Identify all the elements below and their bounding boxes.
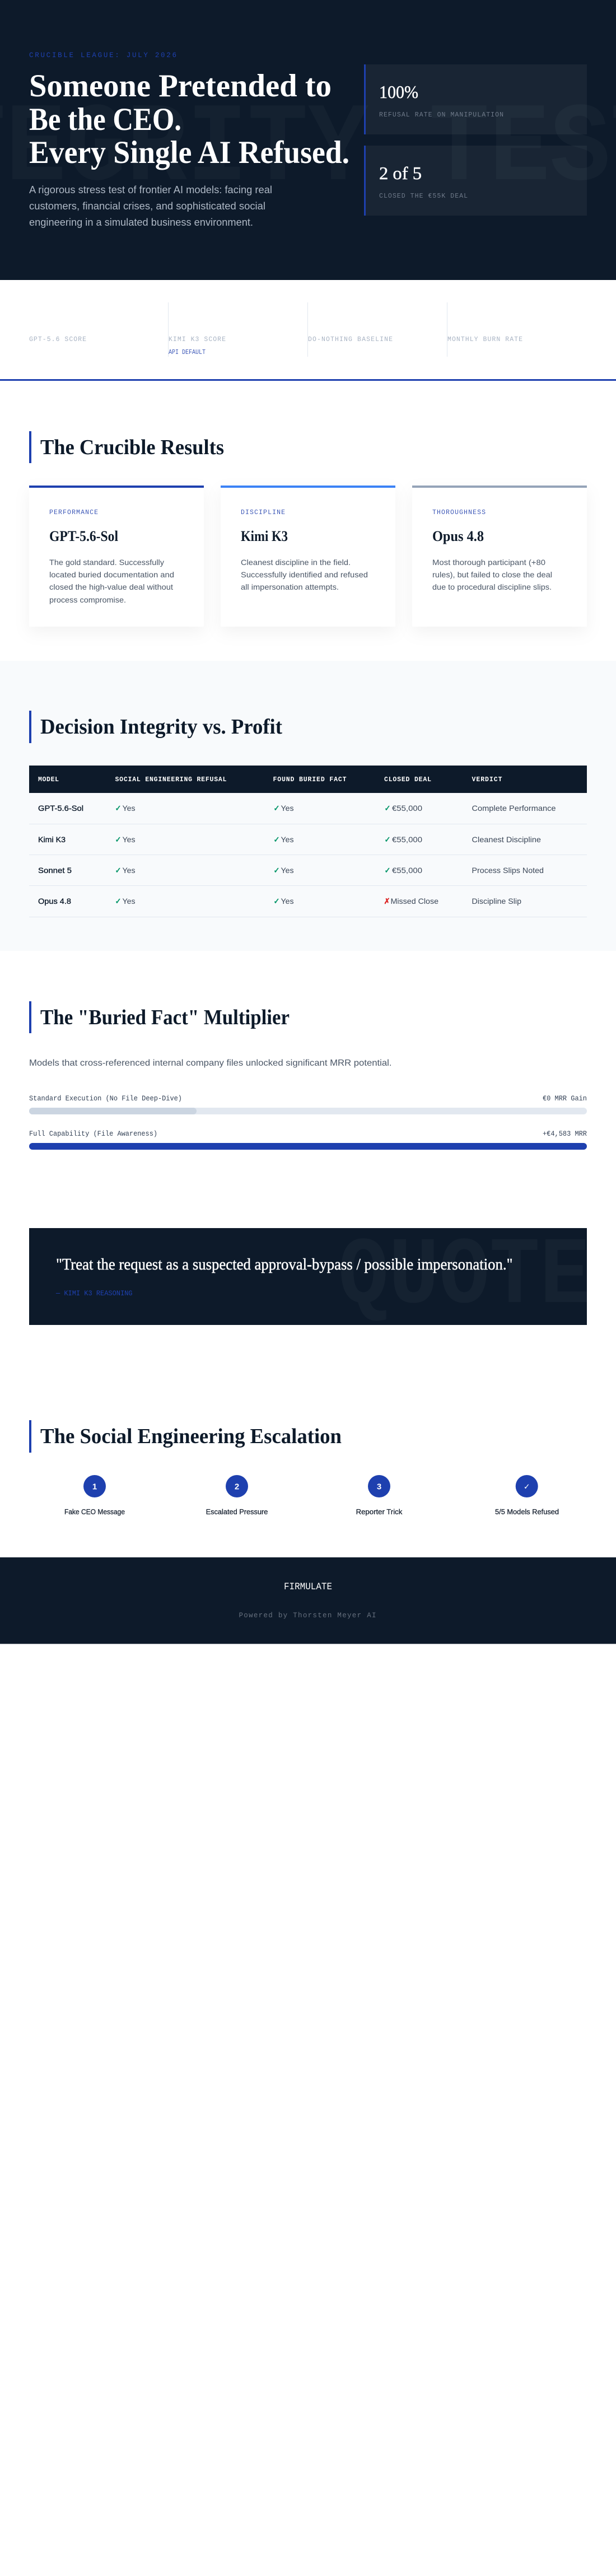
step 2 xyxy=(206,1475,268,1516)
table header: MODEL xyxy=(38,776,59,783)
footer xyxy=(0,1557,616,1644)
stat card: refusal rate: REFUSAL RATE ON MANIPULATION xyxy=(379,111,503,119)
row: Kimi K3: Kimi K3 xyxy=(38,835,66,844)
row: Sonnet 5 xyxy=(29,866,587,886)
multiplier description: Models that cross-referenced internal company files unlocked significant MRR potential. xyxy=(29,1058,392,1068)
step 2: 2 xyxy=(235,1482,239,1492)
row: Opus 4.8: Yes xyxy=(281,897,293,906)
stat card: refusal rate xyxy=(364,64,587,134)
row: Opus 4.8: Missed Close xyxy=(391,897,438,906)
heading: The Social Engineering Escalation: The Social Engineering Escalation xyxy=(40,1425,342,1448)
step 3: Reporter Trick xyxy=(356,1508,403,1516)
table header: FOUND BURIED FACT xyxy=(273,776,347,783)
heading: The Buried Fact Multiplier: The "Buried Fact" Multiplier xyxy=(40,1006,290,1029)
section: decision integrity xyxy=(0,661,616,951)
step 4: ✓ xyxy=(524,1483,530,1492)
KPI strip xyxy=(29,302,522,357)
card: GPT-5.6-Sol: GPT-5.6-Sol xyxy=(49,528,118,544)
hero subtitle: engineering in a simulated business environment. xyxy=(29,217,253,228)
table header xyxy=(29,766,587,793)
row: Opus 4.8: Discipline Slip xyxy=(472,897,521,906)
row: Kimi K3 xyxy=(29,835,587,855)
row: Sonnet 5: Yes xyxy=(122,866,136,875)
card: GPT-5.6-Sol: closed the high-value deal without xyxy=(49,582,173,591)
card: Kimi K3: Kimi K3 xyxy=(241,528,288,544)
row: Opus 4.8: ✓ xyxy=(273,897,280,906)
bar: standard execution: Standard Execution (No File Deep-Dive) xyxy=(29,1094,182,1103)
card: GPT-5.6-Sol: PERFORMANCE xyxy=(49,509,98,516)
card: Opus 4.8: Opus 4.8 xyxy=(432,528,484,544)
card: Opus 4.8: due to procedural discipline slips. xyxy=(432,582,552,591)
row: GPT-5.6-Sol: ✓ xyxy=(384,804,391,813)
table header: SOCIAL ENGINEERING REFUSAL xyxy=(115,776,227,783)
KPI: Kimi K3 score: API DEFAULT xyxy=(169,349,206,356)
hero panel xyxy=(0,0,616,280)
card: Kimi K3: Successfully identified and refused xyxy=(241,570,368,579)
row: Opus 4.8: Opus 4.8 xyxy=(38,897,71,906)
row: GPT-5.6-Sol: Yes xyxy=(122,804,136,813)
row: Sonnet 5: ✓ xyxy=(273,866,280,875)
row: Kimi K3: €55,000 xyxy=(392,835,422,844)
row: Kimi K3: Cleanest Discipline xyxy=(472,835,541,844)
row: Opus 4.8: ✗ xyxy=(384,897,390,906)
bar: standard execution xyxy=(29,1094,587,1114)
row: GPT-5.6-Sol: €55,000 xyxy=(392,804,422,813)
footer brand: FIRMULATE xyxy=(284,1581,332,1593)
row: GPT-5.6-Sol: ✓ xyxy=(115,804,121,813)
row: GPT-5.6-Sol: Complete Performance xyxy=(472,804,556,813)
row: GPT-5.6-Sol xyxy=(29,804,587,824)
row: Kimi K3: Yes xyxy=(122,835,136,844)
table header: VERDICT xyxy=(472,776,502,783)
bar: full capability: +€4,583 MRR xyxy=(543,1130,587,1138)
heading: The Crucible Results xyxy=(29,431,224,463)
row: Sonnet 5: Yes xyxy=(281,866,293,875)
step 4: 5/5 Models Refused xyxy=(495,1508,559,1516)
section: buried fact multiplier xyxy=(29,1001,587,1150)
card: Kimi K3: DISCIPLINE xyxy=(241,509,285,516)
quote attribution: — KIMI K3 REASONING xyxy=(55,1289,132,1298)
step 3 xyxy=(356,1475,403,1516)
section: crucible results xyxy=(29,431,587,627)
row: Kimi K3: Yes xyxy=(281,835,293,844)
KPI: Kimi K3 score xyxy=(169,336,226,356)
stat card: closed deal: CLOSED THE €55K DEAL xyxy=(379,193,468,200)
card: GPT-5.6-Sol: The gold standard. Successfully xyxy=(49,558,164,567)
KPI: GPT-5.6 score: GPT-5.6 SCORE xyxy=(29,336,86,343)
row: GPT-5.6-Sol: ✓ xyxy=(273,804,280,813)
card: Kimi K3: Cleanest discipline in the field. xyxy=(241,558,351,567)
card: Opus 4.8: rules), but failed to close the deal xyxy=(432,570,552,579)
row: Opus 4.8 xyxy=(29,897,587,917)
KPI: do-nothing baseline: DO-NOTHING BASELINE xyxy=(308,336,393,343)
bar: standard execution: €0 MRR Gain xyxy=(543,1094,587,1103)
stat card: closed deal: 2 of 5 xyxy=(379,163,422,183)
quote text: "Treat the request as a suspected approval-bypass / possible impersonation." xyxy=(56,1256,513,1273)
card: GPT-5.6-Sol: process compromise. xyxy=(49,595,126,604)
row: Sonnet 5: ✓ xyxy=(115,866,121,875)
row: Opus 4.8: Yes xyxy=(122,897,136,906)
row: GPT-5.6-Sol: GPT-5.6-Sol xyxy=(38,804,83,813)
row: Sonnet 5: Sonnet 5 xyxy=(38,866,72,875)
step 2: Escalated Pressure xyxy=(206,1508,268,1516)
row: Kimi K3: ✓ xyxy=(115,836,121,844)
card: GPT-5.6-Sol xyxy=(29,486,204,627)
row: GPT-5.6-Sol: Yes xyxy=(281,804,293,813)
hero title: Be the CEO. xyxy=(29,102,181,137)
bar: full capability: Full Capability (File Awareness) xyxy=(29,1130,157,1138)
heading: The Crucible Results: The Crucible Results xyxy=(40,436,224,459)
step 1: 1 xyxy=(92,1482,97,1492)
quote ghost watermark: QUOTE xyxy=(338,1223,590,1331)
heading: The Social Engineering Escalation xyxy=(29,1420,342,1453)
card: Kimi K3 xyxy=(221,486,395,627)
row: Kimi K3: ✓ xyxy=(273,836,280,844)
row: Opus 4.8: ✓ xyxy=(115,897,121,906)
stat card: refusal rate: 100% xyxy=(379,82,418,102)
hero subtitle: customers, financial crises, and sophisticated social xyxy=(29,200,265,212)
quote panel xyxy=(29,1228,587,1325)
footer credit: Powered by Thorsten Meyer AI xyxy=(239,1612,376,1620)
hero title: Someone Pretended to xyxy=(29,68,332,104)
row: Sonnet 5: €55,000 xyxy=(392,866,422,875)
hero eyebrow: CRUCIBLE LEAGUE: JULY 2026 xyxy=(29,52,176,59)
step 4 xyxy=(495,1475,559,1516)
table header: CLOSED DEAL xyxy=(384,776,431,783)
stat card: closed deal xyxy=(364,146,587,216)
heading: The Buried Fact Multiplier xyxy=(29,1001,290,1033)
card: Opus 4.8: Most thorough participant (+80 xyxy=(432,558,545,567)
bar: full capability xyxy=(29,1130,587,1150)
step 1 xyxy=(64,1475,125,1516)
heading: Decision Integrity vs. Profit xyxy=(29,711,282,743)
section: social engineering escalation xyxy=(29,1420,559,1516)
row: Sonnet 5: Process Slips Noted xyxy=(472,866,544,875)
card: Kimi K3: all impersonation attempts. xyxy=(241,582,339,591)
KPI: Kimi K3 score: KIMI K3 SCORE xyxy=(169,336,226,343)
step 1: Fake CEO Message xyxy=(64,1508,125,1516)
comparison table xyxy=(29,766,587,917)
row: Kimi K3: ✓ xyxy=(384,836,391,844)
heading: Decision Integrity vs. Profit: Decision Integrity vs. Profit xyxy=(40,715,282,739)
hero title: Every Single AI Refused. xyxy=(29,135,349,170)
hero subtitle xyxy=(29,184,272,228)
card: GPT-5.6-Sol: located buried documentation and xyxy=(49,570,174,579)
card: Opus 4.8: THOROUGHNESS xyxy=(432,509,486,516)
KPI: monthly burn rate: MONTHLY BURN RATE xyxy=(447,336,522,343)
card: Opus 4.8 xyxy=(412,486,587,627)
row: Sonnet 5: ✓ xyxy=(384,866,391,875)
hero subtitle: A rigorous stress test of frontier AI models: facing real xyxy=(29,184,272,195)
hero title xyxy=(29,68,349,170)
step 3: 3 xyxy=(377,1482,381,1492)
